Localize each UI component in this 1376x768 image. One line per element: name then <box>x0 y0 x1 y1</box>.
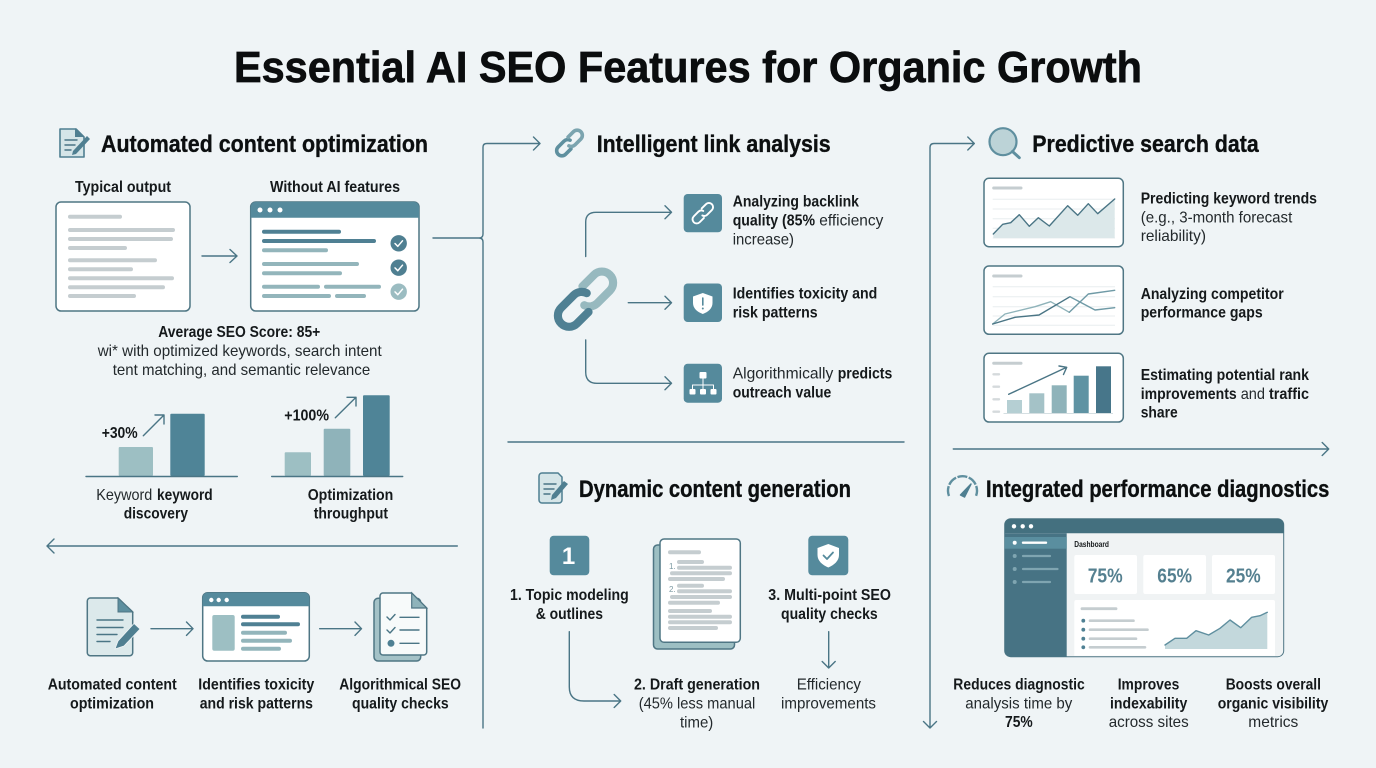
heading: Intelligent link analysis <box>597 131 831 158</box>
text: toxicity <box>733 286 877 322</box>
label: step 2: (45% less manual <box>639 695 755 712</box>
browser card with checks <box>251 202 419 311</box>
text: average SEO score: wi* with optimized keywords, search intent <box>97 343 382 360</box>
label: without AI features: Without AI features <box>270 179 400 196</box>
heading: Automated content optimization <box>101 131 428 158</box>
panel: predictive search data <box>953 128 1329 455</box>
icon: large chain <box>553 267 618 331</box>
text: rank improvements: and <box>1241 386 1265 403</box>
text: boosts visibility <box>1218 676 1328 731</box>
text: backlink quality: efficiency <box>819 212 883 230</box>
connector: right column <box>924 137 974 728</box>
text: backlink quality: Analyzing backlink <box>733 194 859 211</box>
panel: integrated performance diagnostics <box>948 476 1329 731</box>
text: outreach: predicts <box>838 366 892 383</box>
text: outreach: outreach value <box>733 384 831 402</box>
label: step 3: 3. Multi-point SEO <box>768 587 891 604</box>
text: average SEO score <box>97 324 382 379</box>
icon: step 1 <box>550 536 589 575</box>
bar chart: keyword discovery: keyword <box>157 487 213 504</box>
text: competitor gaps <box>1141 286 1284 322</box>
text: backlink quality <box>733 194 883 248</box>
label: automated content optimization: Automated content <box>48 676 177 693</box>
branch arrow: middle <box>628 296 672 309</box>
document stack: 2. <box>669 585 676 594</box>
text: improves indexability: Improves <box>1118 676 1179 693</box>
chart card: rank improvements <box>984 353 1123 422</box>
label: efficiency: Efficiency <box>797 676 861 693</box>
browser illustration <box>203 593 309 661</box>
text: improves indexability <box>1109 676 1189 731</box>
dashboard illustration <box>1005 519 1284 657</box>
bar chart: optimization throughput <box>272 395 403 522</box>
text: keyword trends: Predicting keyword trends <box>1141 190 1317 207</box>
label: algorithmical SEO checks <box>339 676 461 712</box>
text: outreach: Algorithmically <box>733 366 833 383</box>
text: improves indexability: indexability <box>1110 695 1187 712</box>
label: algorithmical SEO checks: quality checks <box>352 695 449 712</box>
branch arrow: top <box>586 206 672 256</box>
document stack <box>654 539 740 649</box>
icon: backlink <box>684 194 722 232</box>
text: reduces diagnostic: 75% <box>1005 714 1033 731</box>
text: outreach <box>733 366 892 402</box>
text: rank improvements: share <box>1141 405 1178 422</box>
document stack: 1. <box>669 562 676 571</box>
heading: Predictive search data <box>1032 131 1259 158</box>
icon: checklist document <box>374 593 427 661</box>
icon: document with pen large <box>87 598 140 656</box>
text: average SEO score: tent matching, and semantic relevance <box>113 362 370 379</box>
label: automated content optimization: optimization <box>70 695 154 712</box>
bar chart: optimization throughput: Optimization <box>308 487 393 504</box>
label: step 3 <box>768 587 891 623</box>
dashboard illustration: Dashboard <box>1074 539 1109 549</box>
text: reduces diagnostic: Reduces diagnostic <box>953 676 1085 693</box>
label: algorithmical SEO checks: Algorithmical SEO <box>339 676 461 693</box>
text: reduces diagnostic <box>953 676 1085 731</box>
dashboard illustration: 65% <box>1157 564 1192 588</box>
document card <box>56 202 190 311</box>
label: step 1: 1. Topic modeling <box>510 587 629 604</box>
bar chart: optimization throughput: +100% <box>284 408 329 425</box>
icon: document with pen <box>539 473 568 503</box>
text: competitor gaps: performance gaps <box>1141 305 1263 322</box>
text: average SEO score: Average SEO Score: 85+ <box>158 324 320 341</box>
label: typical output: Typical output <box>75 179 172 196</box>
label: automated content optimization <box>48 676 177 712</box>
bar chart: keyword discovery: discovery <box>124 506 188 522</box>
label: step 2 <box>634 676 760 731</box>
icon: document with pen <box>60 128 90 157</box>
icon: step 1: 1 <box>562 543 575 570</box>
panel: automated content optimization <box>47 128 461 712</box>
text: rank improvements: improvements <box>1141 386 1237 403</box>
label: step 3: quality checks <box>781 606 878 623</box>
label: step 2: 2. Draft generation <box>634 676 760 693</box>
bar chart: keyword discovery: Keyword <box>96 487 152 504</box>
text: keyword trends: (e.g., 3-month forecast <box>1141 209 1293 226</box>
label: efficiency <box>781 676 876 712</box>
text: backlink quality: quality (85% <box>733 212 815 230</box>
text: competitor gaps: Analyzing competitor <box>1141 286 1284 303</box>
text: improves indexability: across sites <box>1109 714 1189 731</box>
text: boosts visibility: organic visibility <box>1218 695 1328 712</box>
arrow: down <box>822 632 835 668</box>
dashboard illustration: 25% <box>1226 564 1261 588</box>
text: toxicity: Identifies toxicity and <box>733 286 877 303</box>
text: keyword trends: reliability) <box>1141 228 1206 245</box>
label: identifies toxicity <box>198 676 314 712</box>
connector: left column to link analysis <box>433 137 540 728</box>
title: Essential AI SEO Features for Organic Growth <box>234 43 1142 92</box>
label: step 1: & outlines <box>536 606 603 623</box>
text: rank improvements <box>1141 367 1309 422</box>
icon: hierarchy <box>684 364 722 403</box>
label: identifies toxicity: Identifies toxicity <box>198 676 314 693</box>
chart card: keyword trends <box>984 178 1123 247</box>
label: efficiency: improvements <box>781 695 876 712</box>
icon: magnifier <box>990 128 1019 158</box>
text: toxicity: risk patterns <box>733 305 818 322</box>
icon: shield check <box>808 536 848 575</box>
text: rank improvements: traffic <box>1269 386 1309 403</box>
label: step 1 <box>510 587 629 623</box>
icon: shield alert <box>684 284 722 322</box>
bar chart: keyword discovery <box>86 414 237 522</box>
text: backlink quality: increase) <box>733 231 794 248</box>
arrow <box>202 250 237 262</box>
arrow: right <box>953 442 1329 456</box>
bar chart: keyword discovery: +30% <box>102 425 138 442</box>
arrow: long left <box>47 539 457 553</box>
chart card: competitor gaps <box>984 266 1123 334</box>
icon: link <box>555 128 584 158</box>
text: boosts visibility: metrics <box>1248 714 1298 731</box>
dashboard illustration: 75% <box>1088 564 1123 588</box>
heading: Dynamic content generation <box>579 476 851 503</box>
label: identifies toxicity: and risk patterns <box>200 695 313 712</box>
bar chart: optimization throughput: throughput <box>314 506 389 522</box>
arrow <box>320 622 362 635</box>
arrow <box>151 622 193 635</box>
text: keyword trends <box>1141 190 1317 245</box>
text: boosts visibility: Boosts overall <box>1226 676 1321 693</box>
icon: gauge <box>948 476 977 497</box>
text: rank improvements: Estimating potential rank <box>1141 367 1309 384</box>
arrow: step 1 to 2 <box>569 632 621 708</box>
panel: intelligent link analysis <box>553 128 892 403</box>
branch arrow: bottom <box>586 340 672 390</box>
panel: dynamic content generation <box>510 473 891 731</box>
label: step 2: time) <box>680 714 713 731</box>
text: reduces diagnostic: analysis time by <box>965 695 1072 712</box>
